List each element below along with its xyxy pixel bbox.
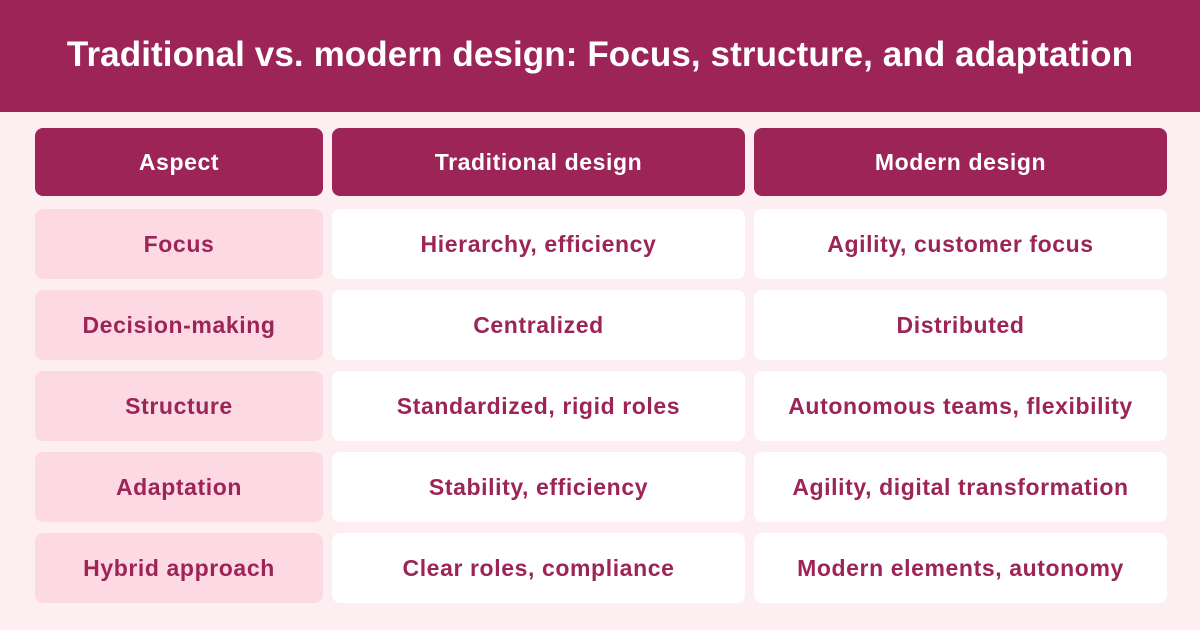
row: Focus aspect <box>35 209 323 279</box>
row: Structure aspect <box>35 371 323 441</box>
row: Hybrid approach modern: Modern elements, autonomy <box>797 554 1124 580</box>
row: Decision-making aspect: Decision-making <box>82 312 276 338</box>
row: Structure aspect: Structure <box>125 392 233 418</box>
row: Structure traditional: Standardized, rigid roles <box>397 392 680 418</box>
row: Hybrid approach modern <box>754 533 1167 603</box>
row: Adaptation traditional: Stability, efficiency <box>429 474 648 500</box>
row: Structure modern: Autonomous teams, flexibility <box>788 392 1133 418</box>
title: Traditional vs. modern design: Focus, structure, and adaptation <box>67 35 1133 74</box>
row: Focus modern <box>754 209 1167 279</box>
row: Decision-making aspect <box>35 290 323 360</box>
row: Adaptation traditional <box>332 452 745 522</box>
row: Focus modern: Agility, customer focus <box>827 230 1094 256</box>
column header: Aspect <box>35 128 323 196</box>
row: Decision-making traditional <box>332 290 745 360</box>
column header: Modern design: Modern design <box>875 148 1046 174</box>
row: Adaptation modern <box>754 452 1167 522</box>
row: Decision-making modern: Distributed <box>896 312 1024 338</box>
row: Focus aspect: Focus <box>144 230 214 256</box>
row: Adaptation aspect: Adaptation <box>116 474 242 500</box>
row: Structure modern <box>754 371 1167 441</box>
column header: Traditional design: Traditional design <box>435 148 642 174</box>
row: Adaptation modern: Agility, digital transformation <box>792 474 1129 500</box>
row: Focus traditional <box>332 209 745 279</box>
column header: Aspect: Aspect <box>139 148 219 174</box>
row: Decision-making modern <box>754 290 1167 360</box>
row: Adaptation aspect <box>35 452 323 522</box>
column header: Traditional design <box>332 128 745 196</box>
row: Hybrid approach traditional <box>332 533 745 603</box>
row: Hybrid approach aspect: Hybrid approach <box>83 554 275 580</box>
header band <box>0 0 1200 112</box>
row: Decision-making traditional: Centralized <box>473 312 604 338</box>
row: Hybrid approach aspect <box>35 533 323 603</box>
row: Structure traditional <box>332 371 745 441</box>
row: Focus traditional: Hierarchy, efficiency <box>421 230 656 256</box>
column header: Modern design <box>754 128 1167 196</box>
row: Hybrid approach traditional: Clear roles, compliance <box>402 554 675 580</box>
